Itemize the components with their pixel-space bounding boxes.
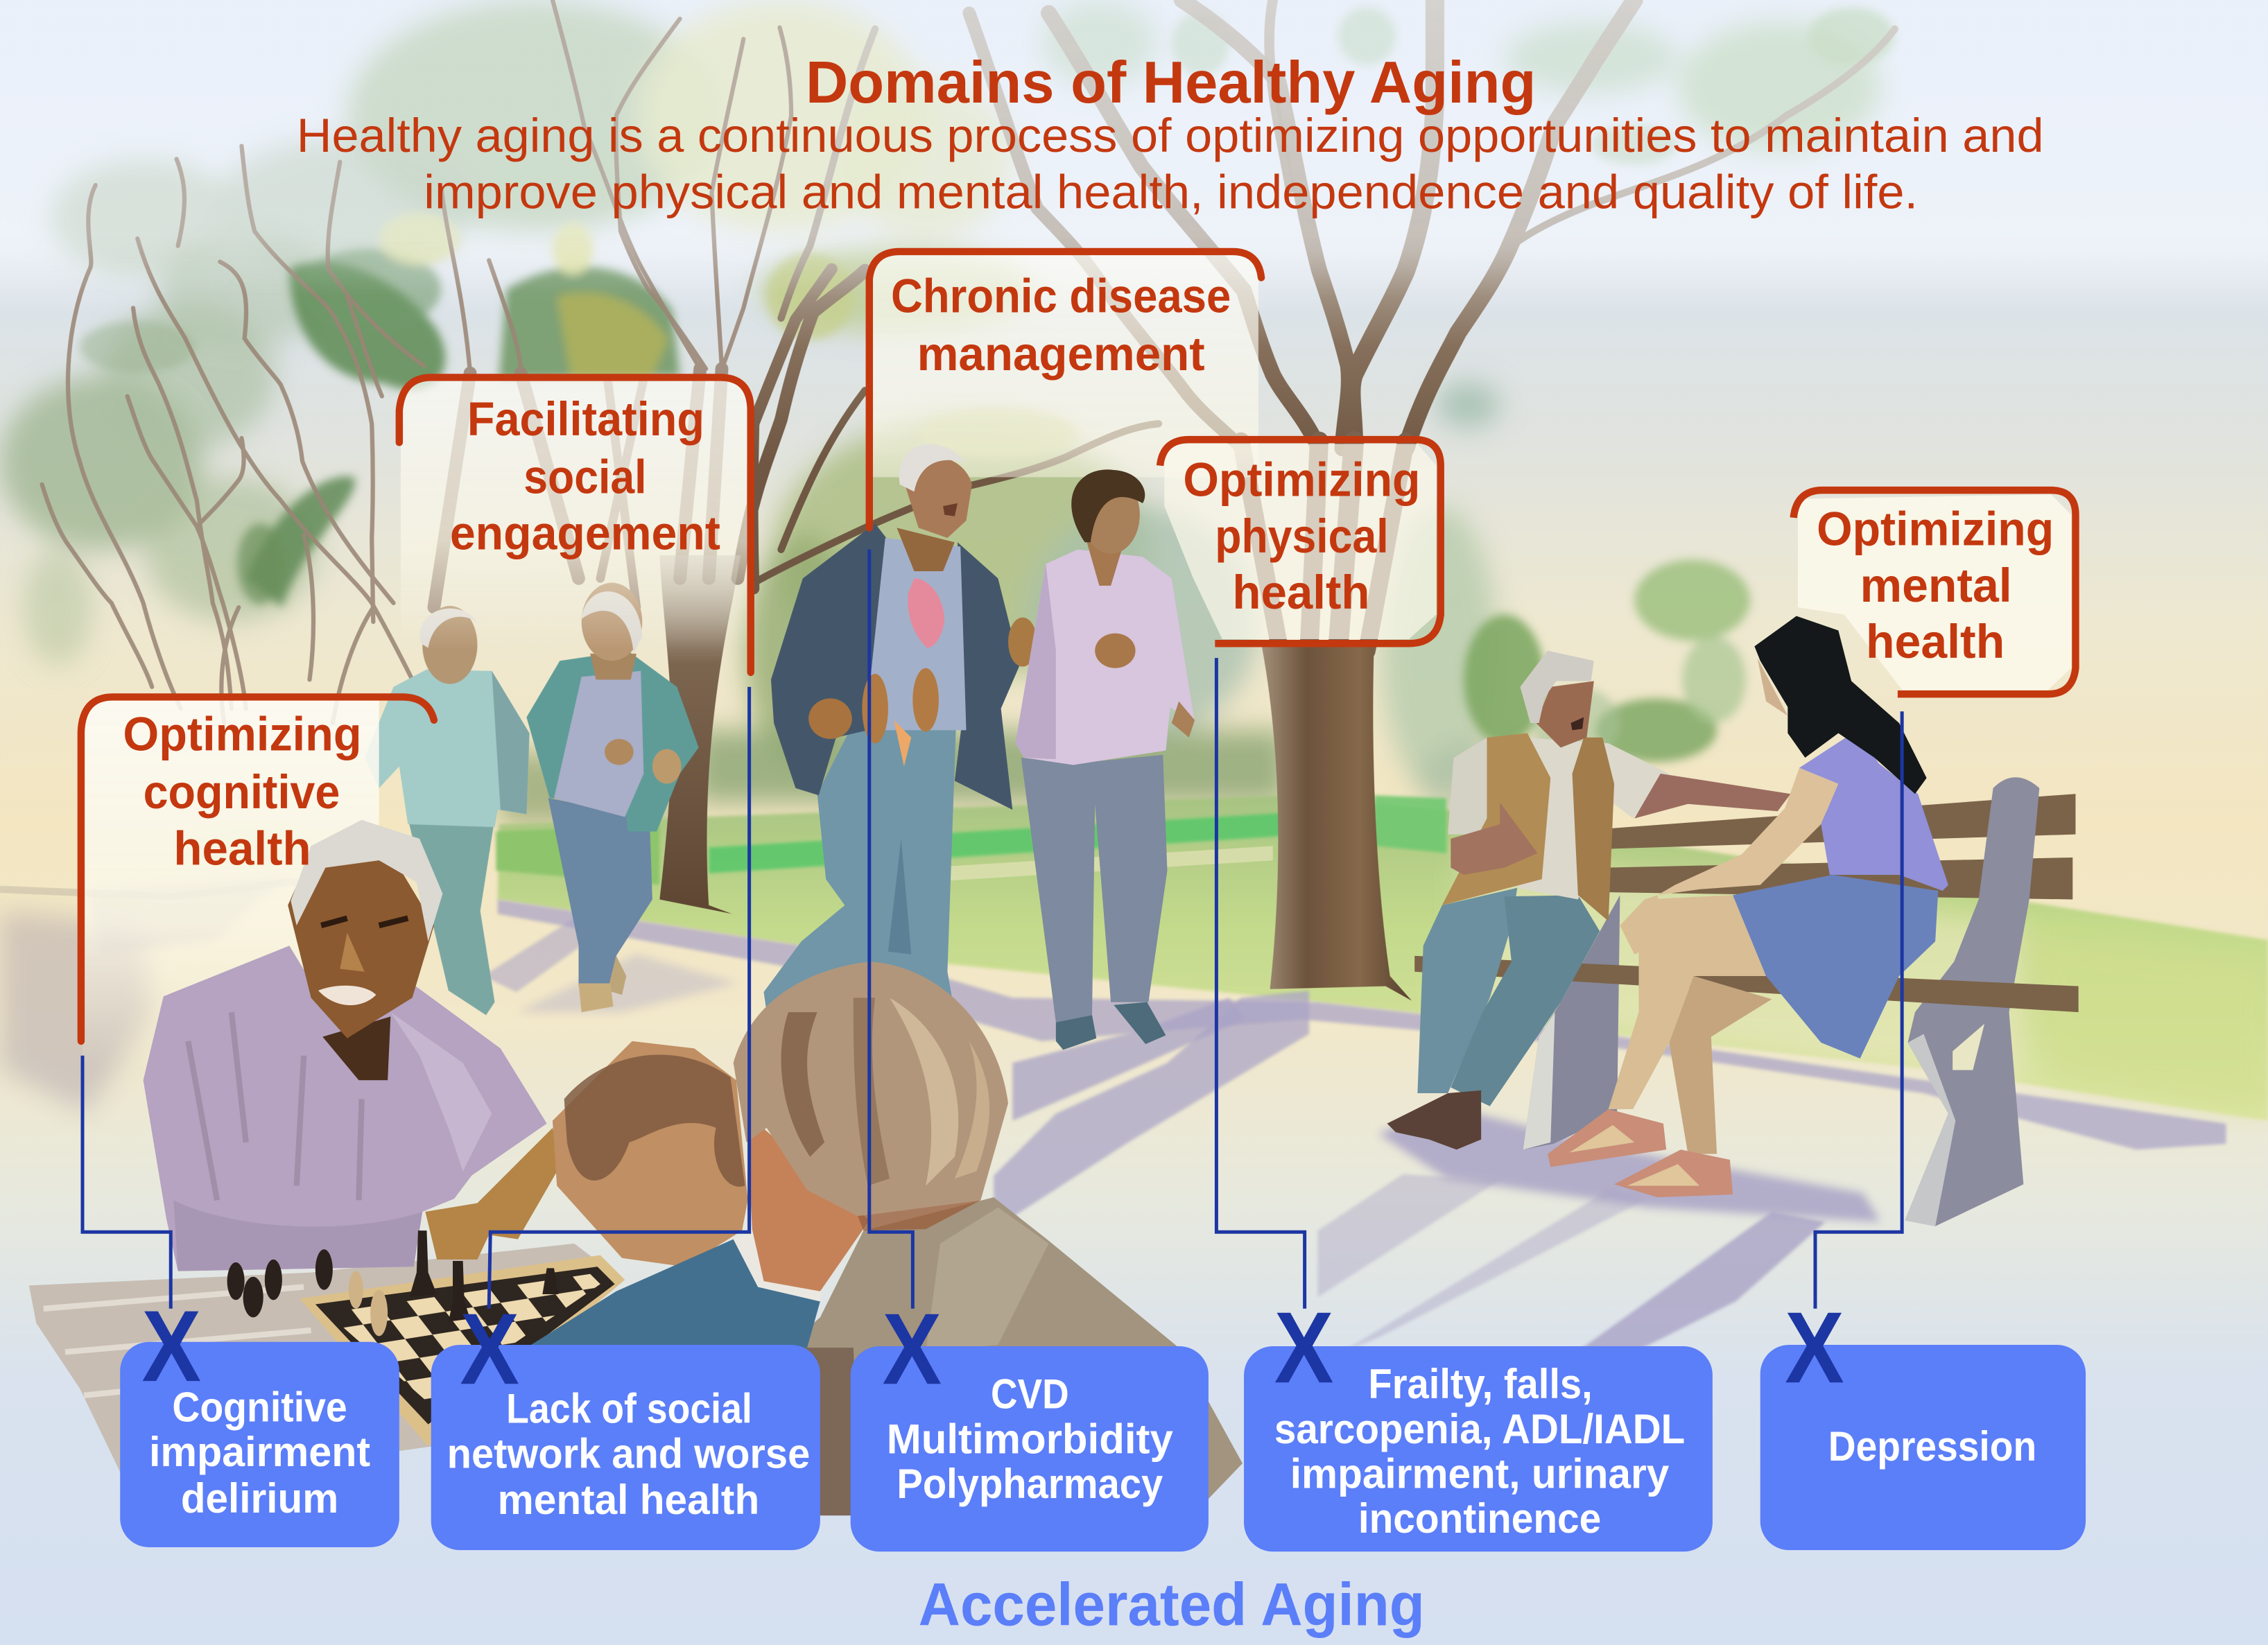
figure: left person head	[553, 1041, 748, 1267]
outcome box: lack of social network: mental health	[498, 1476, 759, 1523]
chess pieces	[227, 1230, 558, 1336]
person: man with heart and kidneys	[763, 444, 1037, 1012]
callout frame: facilitating social engagement	[399, 377, 751, 672]
outcome box: cvd, multimorbidity, polypharmacy: Polypharmacy	[897, 1460, 1163, 1507]
tree trunk: central tree	[1261, 643, 1412, 1000]
outcome box: frailty and falls: impairment, urinary	[1290, 1450, 1670, 1497]
label: chronic disease management: Chronic disease	[891, 270, 1231, 323]
outcome box: depression: Depression	[1828, 1422, 2036, 1470]
table with chess set	[29, 1244, 625, 1475]
person: seated man in vest	[1387, 651, 1791, 1149]
figure: right person neck	[746, 1113, 869, 1291]
label: chronic disease management: management	[917, 327, 1205, 381]
outcome box: lack of social network	[431, 1345, 820, 1550]
icon: x mark cognitive: X	[142, 1289, 201, 1402]
label: optimizing mental health	[1817, 502, 2054, 668]
ground shadows on the path	[0, 875, 2226, 1352]
label: facilitating social engagement: engagement	[450, 507, 720, 560]
label: optimizing cognitive health: cognitive	[144, 765, 340, 819]
connector: cognitive health to outcome	[83, 1056, 171, 1309]
label: optimizing cognitive health: Optimizing	[123, 708, 362, 761]
outcome box: frailty and falls: Frailty, falls,	[1368, 1360, 1593, 1407]
connector: social engagement to outcome	[489, 687, 750, 1309]
subtitle	[297, 109, 2044, 218]
foreground: backs of two seated people	[526, 961, 1243, 1515]
callout frame: optimizing physical health	[1160, 439, 1441, 643]
label: facilitating social engagement: social	[523, 450, 647, 503]
outcome box: depression	[1760, 1345, 2086, 1550]
person: chess player	[144, 820, 561, 1271]
icon: x mark physical: X	[1274, 1291, 1333, 1404]
connector: mental health to outcome	[1815, 711, 1902, 1309]
label: chronic disease management	[891, 270, 1231, 381]
tree trunk: branches joining the central trunk	[1241, 441, 1406, 651]
label: optimizing physical health: health	[1232, 566, 1370, 619]
tree branches: saplings on the left	[42, 0, 791, 723]
outcome box: cvd, multimorbidity, polypharmacy: CVD	[991, 1370, 1069, 1418]
icon: heart organ	[908, 578, 944, 648]
figure: right person head	[734, 961, 1008, 1216]
label: optimizing physical health	[1183, 453, 1421, 619]
label: optimizing mental health: health	[1866, 615, 2005, 668]
outcome box: cognitive impairment: impairment	[149, 1428, 370, 1475]
callout panel backing: facilitating social engagement	[401, 379, 748, 651]
icon: x mark mental: X	[1785, 1291, 1844, 1404]
icon: x mark social: X	[460, 1292, 519, 1405]
callout frame: optimizing mental health	[1794, 490, 2075, 694]
outcome box: frailty and falls: incontinence	[1358, 1495, 1601, 1542]
subtitle: Healthy aging is a continuous process of optimizing opportunities to maintain and	[297, 109, 2044, 162]
label: facilitating social engagement: Facilitating	[467, 392, 704, 446]
tree trunk: rear tree	[659, 555, 741, 914]
outcome box: cvd, multimorbidity, polypharmacy	[851, 1346, 1209, 1551]
label: optimizing cognitive health: health	[173, 821, 311, 875]
callout frame: optimizing cognitive health	[81, 697, 434, 1041]
outcome box: frailty and falls	[1244, 1346, 1713, 1551]
person: rear walking woman with teal jacket	[526, 583, 699, 1012]
label: optimizing mental health: mental	[1860, 559, 2012, 612]
callout frame: chronic disease management	[869, 252, 1261, 528]
icon: kidneys	[862, 668, 939, 767]
label: optimizing cognitive health	[123, 708, 362, 875]
person: rear walking woman in pale teal	[365, 606, 530, 1015]
icon: x mark chronic disease: X	[883, 1292, 942, 1405]
person: young woman on bench	[1548, 616, 1948, 1197]
label: facilitating social engagement	[450, 392, 720, 560]
connector: chronic disease to outcome	[869, 550, 912, 1309]
figure: left person blue jacket	[526, 1239, 820, 1348]
callout panel backing: chronic disease management	[872, 253, 1258, 578]
outcome box: lack of social network: network and worse	[447, 1429, 810, 1477]
connector: physical health to outcome	[1216, 658, 1305, 1309]
outcome box: cognitive impairment: delirium	[181, 1474, 338, 1522]
outcome box: cvd, multimorbidity, polypharmacy: Multimorbidity	[887, 1415, 1173, 1462]
outcome box: frailty and falls: sarcopenia, ADL/IADL	[1274, 1405, 1685, 1452]
outcome box: cognitive impairment: Cognitive	[172, 1384, 347, 1431]
label: optimizing mental health: Optimizing	[1817, 502, 2054, 555]
tree branches: central trees	[738, 0, 1895, 589]
subtitle: improve physical and mental health, independence and quality of life.	[424, 165, 1918, 218]
outcome box: lack of social network: Lack of social	[506, 1385, 752, 1432]
sky haze over upper trees	[0, 0, 2268, 297]
grass and park lawn	[0, 795, 2268, 1121]
bench: slats and legs	[1414, 777, 2079, 1226]
footer heading: accelerated aging: Accelerated Aging	[919, 1571, 1425, 1639]
figure: right person tan jacket	[788, 1197, 1243, 1515]
foliage: tree canopy washes	[0, 0, 1895, 824]
outcome box: cognitive impairment	[120, 1342, 399, 1547]
label: optimizing physical health: physical	[1215, 510, 1389, 563]
callout panel backing: optimizing cognitive health	[83, 699, 379, 1070]
person: woman in lilac jacket	[1015, 469, 1195, 1050]
title: Domains of Healthy Aging	[806, 50, 1536, 116]
label: optimizing physical health: Optimizing	[1183, 453, 1421, 506]
